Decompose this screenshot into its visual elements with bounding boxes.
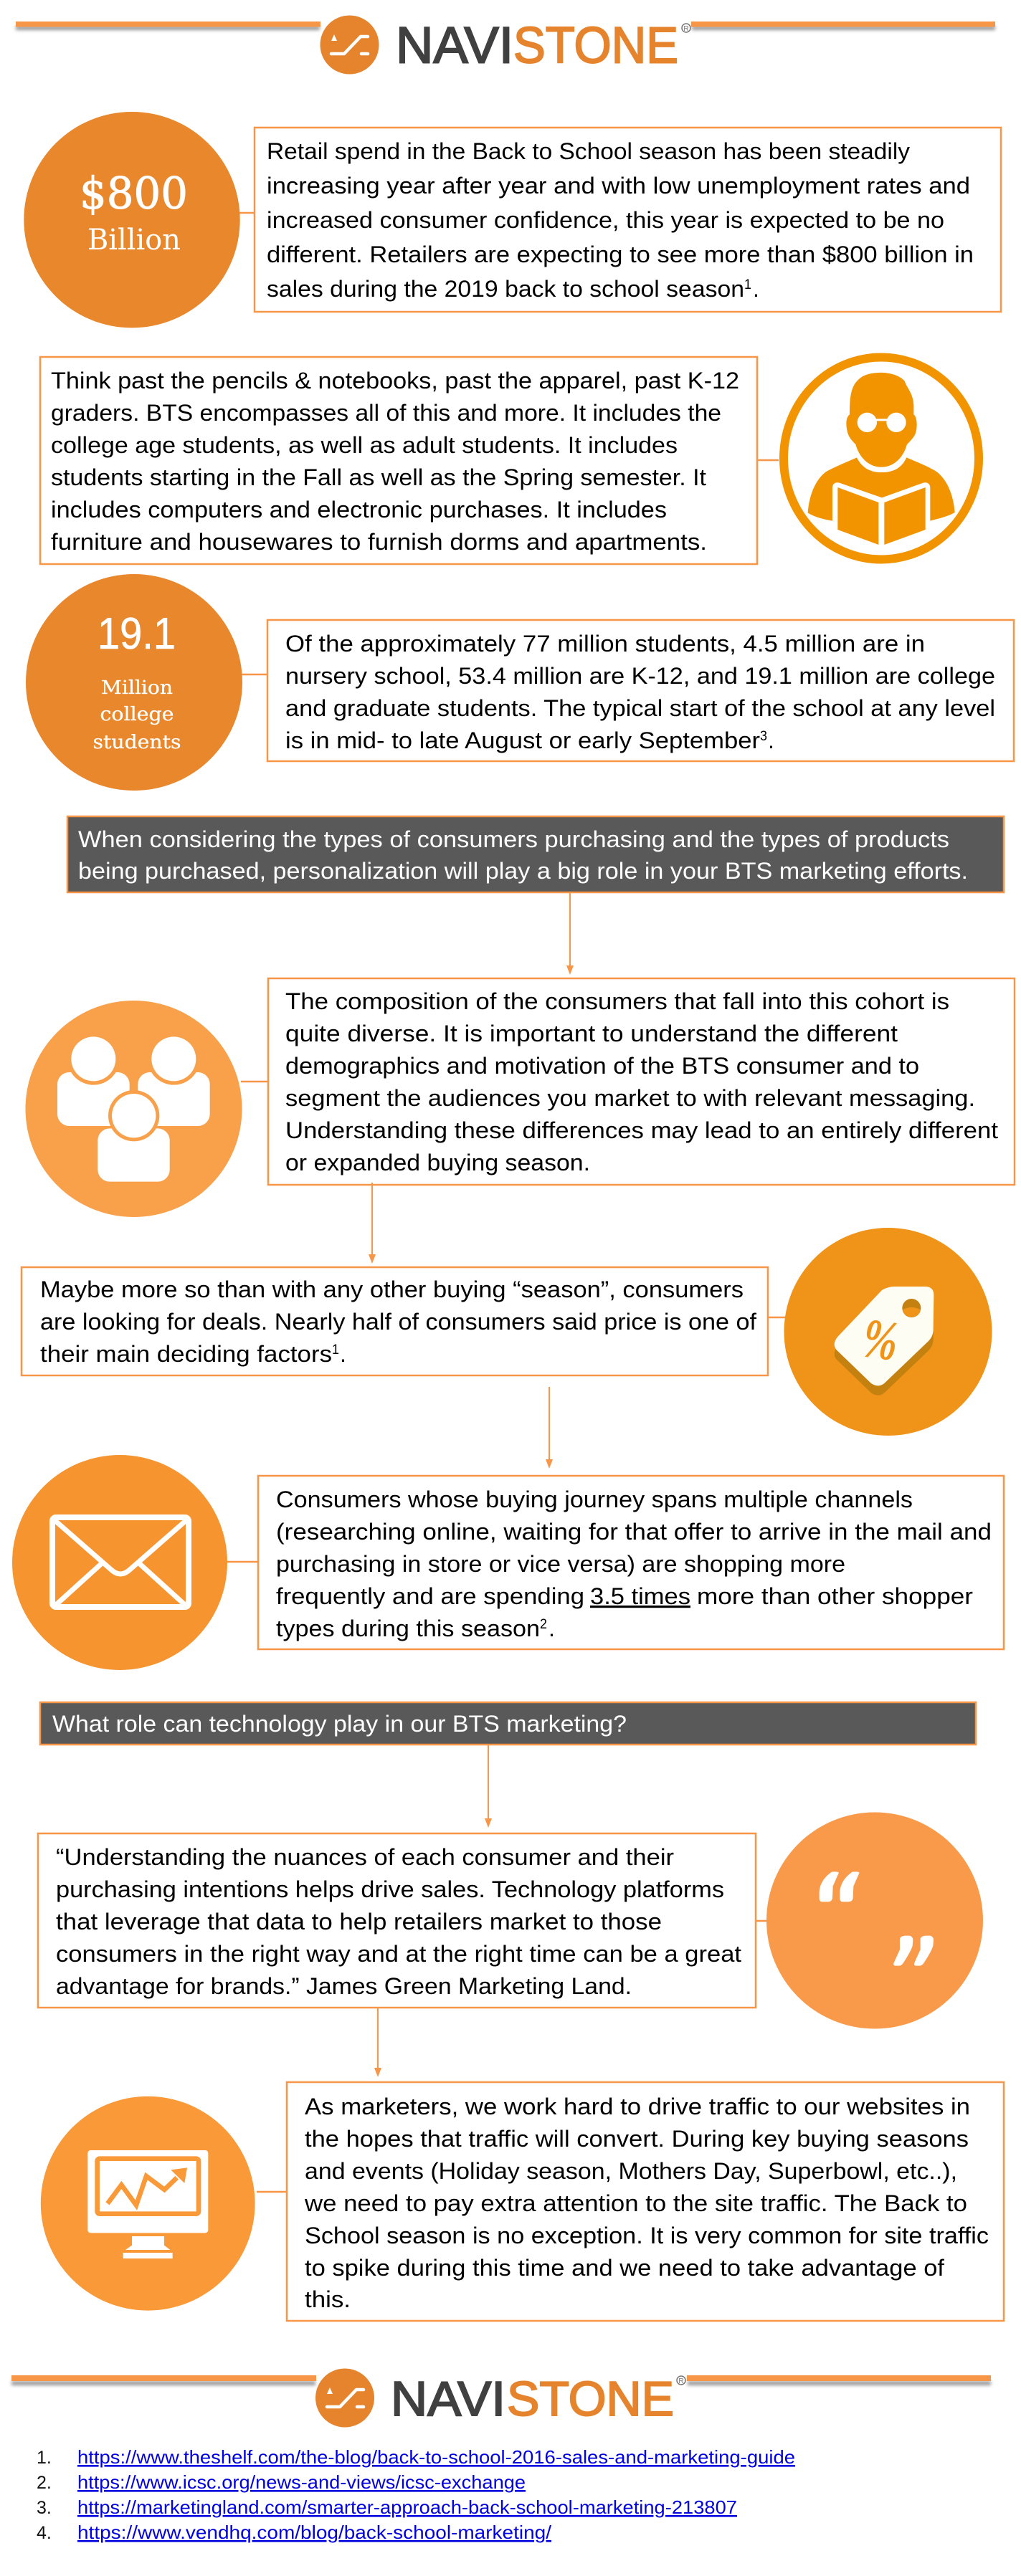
header logo bbox=[16, 16, 995, 75]
callout: personalization: When considering the types of consumers purchasing and the types of products bbox=[78, 826, 949, 852]
stat circle: 19.1 million: 19.1 bbox=[98, 609, 176, 659]
icon: monitor with chart bbox=[41, 2096, 255, 2311]
text box: James Green quote: consumers in the right way and at the right time can be a great bbox=[56, 1941, 741, 1967]
text box: marketers: the hopes that traffic will convert. During key buying seasons bbox=[305, 2126, 969, 2152]
text box: channels: 2 bbox=[540, 1617, 547, 1632]
text box: channels: types during this season bbox=[276, 1616, 540, 1641]
stat circle: $800 billion: Billion bbox=[87, 224, 181, 257]
text box: BTS encompasses: Think past the pencils & notebooks, past the apparel, past K-12 bbox=[51, 368, 739, 393]
text box: marketers: we need to pay extra attention to the site traffic. The Back to bbox=[304, 2190, 967, 2216]
footer logo wordmark bbox=[391, 2372, 685, 2426]
text box: deals bbox=[22, 1267, 768, 1375]
callout: personalization bbox=[67, 816, 1004, 892]
text box: James Green quote: that leverage that data to help retailers market to those bbox=[56, 1909, 662, 1935]
text box: channels: frequently and are spending bbox=[276, 1583, 584, 1609]
text box: composition: demographics and motivation of the BTS consumer and to bbox=[285, 1053, 919, 1079]
text box: BTS encompasses: furniture and housewares to furnish dorms and apartments. bbox=[51, 529, 707, 555]
text box: channels: 3.5 times bbox=[590, 1583, 690, 1609]
text box: James Green quote: purchasing intentions helps drive sales. Technology platforms bbox=[56, 1876, 724, 1902]
text box: marketers bbox=[287, 2082, 1004, 2321]
text box: retail spend: 1 bbox=[744, 277, 751, 292]
panel: multiple channels bbox=[12, 1455, 1004, 1670]
panel: think past the pencils bbox=[40, 357, 979, 564]
icon: envelope bbox=[12, 1455, 227, 1670]
text box: composition: segment the audiences you market to with relevant messaging. bbox=[285, 1085, 975, 1111]
text box: deals: are looking for deals. Nearly half of consumers said price is one of bbox=[40, 1309, 756, 1335]
arrow: callout to composition bbox=[566, 892, 574, 975]
text box: BTS encompasses: students starting in the Fall as well as the Spring semester. It bbox=[51, 464, 706, 490]
text box: retail spend: increased consumer confidence, this year is expected to be no bbox=[267, 207, 944, 233]
references list: https://www.vendhq.com/blog/back-school-marketing/ bbox=[77, 2522, 552, 2543]
text box: channels: Consumers whose buying journey spans multiple channels bbox=[276, 1487, 913, 1512]
footer logo bbox=[11, 2368, 991, 2427]
references list: 3. bbox=[37, 2498, 52, 2518]
icon: group of people bbox=[26, 1001, 242, 1217]
text box: marketers: this. bbox=[305, 2286, 351, 2312]
callout: technology question bbox=[40, 1702, 976, 1745]
text box: retail spend: different. Retailers are expecting to see more than $800 billion in bbox=[267, 242, 974, 267]
panel: 19.1 million college students bbox=[26, 574, 1014, 791]
text box: 77 million students: and graduate students. The typical start of the school at any level bbox=[285, 695, 995, 721]
text box: composition: or expanded buying season. bbox=[285, 1150, 590, 1175]
references list bbox=[37, 2446, 795, 2543]
references list: https://www.theshelf.com/the-blog/back-to-school-2016-sales-and-marketing-guide bbox=[77, 2446, 795, 2468]
text box: BTS encompasses: includes computers and electronic purchases. It includes bbox=[51, 497, 667, 523]
references list: https://marketingland.com/smarter-approach-back-school-marketing-213807 bbox=[77, 2496, 737, 2518]
text box: retail spend bbox=[255, 128, 1001, 312]
arrow: quote to marketers bbox=[374, 2008, 381, 2077]
text box: BTS encompasses: college age students, as well as adult students. It includes bbox=[51, 432, 678, 458]
text box: James Green quote: “Understanding the nuances of each consumer and their bbox=[56, 1844, 674, 1870]
text box: channels: more than other shopper bbox=[697, 1583, 973, 1609]
text box: retail spend: Retail spend in the Back to School season has been steadily bbox=[267, 138, 910, 164]
text box: channels bbox=[258, 1476, 1004, 1649]
text box: deals: their main deciding factors bbox=[40, 1341, 332, 1367]
text box: channels: . bbox=[549, 1616, 555, 1641]
callout: personalization: being purchased, personalization will play a big role in your BTS marketing efforts. bbox=[78, 858, 968, 884]
text box: composition bbox=[268, 978, 1015, 1185]
text box: marketers: and events (Holiday season, Mothers Day, Superbowl, etc..), bbox=[305, 2158, 957, 2184]
text box: 77 million students: 3 bbox=[760, 729, 767, 744]
text box: James Green quote bbox=[38, 1833, 756, 2008]
text box: retail spend: sales during the 2019 back to school season bbox=[267, 276, 744, 302]
text box: marketers: to spike during this time and we need to take advantage of bbox=[305, 2255, 944, 2281]
text box: composition: quite diverse. It is important to understand the different bbox=[285, 1021, 898, 1046]
stat circle: $800 billion: $800 bbox=[80, 168, 188, 219]
panel: site traffic bbox=[41, 2082, 1004, 2321]
logo wordmark: STONE bbox=[513, 17, 678, 75]
text box: 77 million students bbox=[267, 620, 1014, 761]
stat circle: 19.1 million: students bbox=[93, 732, 181, 753]
text box: BTS encompasses bbox=[40, 357, 757, 564]
arrow: composition to deals bbox=[369, 1183, 376, 1264]
logo wordmark bbox=[396, 17, 690, 75]
panel: looking for deals bbox=[22, 1228, 992, 1436]
icon: student reading bbox=[784, 357, 979, 559]
references list: 4. bbox=[37, 2523, 52, 2543]
text box: 77 million students: is in mid- to late August or early September bbox=[285, 728, 760, 753]
logo mark bbox=[320, 16, 379, 75]
references list: 2. bbox=[37, 2473, 52, 2493]
panel: composition of consumers bbox=[26, 978, 1015, 1217]
text box: deals: 1 bbox=[332, 1342, 339, 1358]
stat circle: 19.1 million bbox=[26, 574, 242, 791]
footer logo mark bbox=[315, 2368, 374, 2427]
references list: https://www.icsc.org/news-and-views/icsc-exchange bbox=[77, 2471, 526, 2493]
panel: $800 billion bbox=[24, 112, 1001, 328]
stat circle: 19.1 million: Million bbox=[101, 677, 173, 699]
icon: percent price tag: % bbox=[859, 1306, 902, 1373]
text box: retail spend: increasing year after year and with low unemployment rates and bbox=[267, 173, 970, 199]
arrow: deals to channels bbox=[546, 1387, 553, 1469]
text box: retail spend: . bbox=[753, 276, 759, 302]
panel: quote bbox=[38, 1812, 983, 2028]
icon: percent price tag bbox=[784, 1228, 992, 1436]
icon: quotation marks bbox=[766, 1812, 983, 2028]
text box: BTS encompasses: graders. BTS encompasses all of this and more. It includes the bbox=[51, 400, 721, 426]
text box: composition: Understanding these differences may lead to an entirely different bbox=[285, 1117, 998, 1143]
text box: 77 million students: . bbox=[768, 728, 774, 753]
text box: James Green quote: advantage for brands.” James Green Marketing Land. bbox=[56, 1973, 632, 1999]
stat circle: $800 billion bbox=[24, 112, 240, 328]
text box: channels: purchasing in store or vice versa) are shopping more bbox=[276, 1551, 845, 1577]
text box: deals: . bbox=[340, 1341, 346, 1367]
logo wordmark: R bbox=[683, 25, 689, 33]
callout: technology question: What role can technology play in our BTS marketing? bbox=[52, 1711, 627, 1737]
text box: marketers: As marketers, we work hard to drive traffic to our websites in bbox=[305, 2094, 970, 2119]
text box: composition: The composition of the consumers that fall into this cohort is bbox=[285, 988, 949, 1014]
logo wordmark: NAVI bbox=[396, 17, 513, 75]
text box: marketers: School season is no exception. It is very common for site traffic bbox=[305, 2223, 989, 2248]
stat circle: 19.1 million: college bbox=[100, 704, 174, 725]
footer logo wordmark: R bbox=[678, 2377, 684, 2385]
footer logo wordmark: STONE bbox=[507, 2372, 674, 2426]
text box: channels: (researching online, waiting for that offer to arrive in the mail and bbox=[276, 1519, 992, 1545]
text box: 77 million students: Of the approximately 77 million students, 4.5 million are in bbox=[285, 631, 925, 657]
references list: 1. bbox=[37, 2448, 52, 2468]
text box: deals: Maybe more so than with any other buying “season”, consumers bbox=[40, 1277, 744, 1302]
arrow: technology to quote bbox=[485, 1745, 492, 1828]
text box: 77 million students: nursery school, 53.4 million are K-12, and 19.1 million are college bbox=[285, 663, 995, 689]
footer logo wordmark: NAVI bbox=[391, 2372, 505, 2426]
